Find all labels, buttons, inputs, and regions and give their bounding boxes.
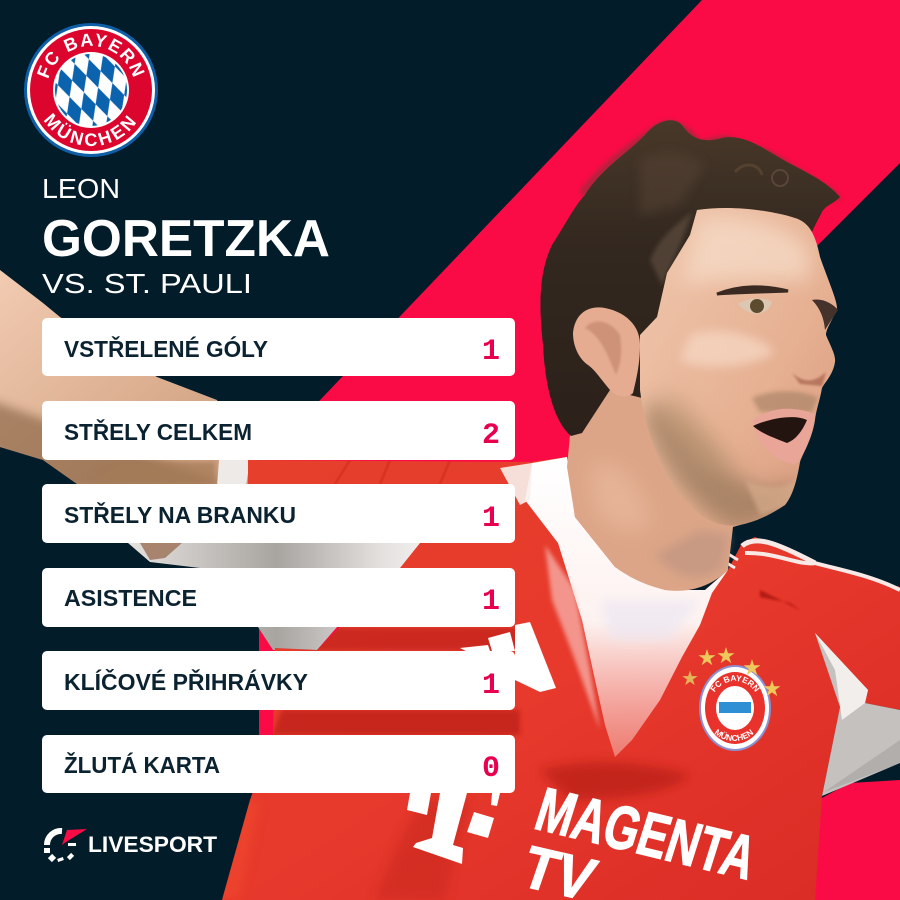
hair	[540, 120, 842, 436]
ear	[573, 307, 640, 396]
stat row: yellow card	[42, 735, 515, 793]
jersey crest and stars: ★	[697, 645, 717, 670]
jersey crest and stars: FC BAYERN	[710, 675, 760, 692]
stat row: shots on target: STŘELY NA BRANKU	[64, 501, 296, 528]
Livesport wordmark: LIVESPORT	[88, 832, 218, 857]
jersey sleeve grey	[128, 460, 425, 650]
mouth	[753, 409, 815, 464]
jersey crest and stars: ★	[762, 676, 782, 701]
stat row: total shots	[42, 401, 515, 460]
player surname: GORETZKA	[42, 210, 330, 268]
stat row: yellow card: ŽLUTÁ KARTA	[64, 751, 220, 778]
adidas stripes	[460, 622, 556, 692]
stat row: key passes: 1	[482, 669, 500, 703]
nose shadow	[792, 372, 826, 386]
stat row: goals: VSTŘELENÉ GÓLY	[64, 335, 268, 362]
jersey crest and stars: MÜNCHEN	[714, 729, 754, 741]
player first name: LEON	[42, 173, 120, 204]
stat row: goals: 1	[482, 335, 500, 369]
jersey crest and stars: ★	[716, 643, 736, 668]
stat row: shots on target: 1	[482, 502, 500, 536]
stat row: yellow card: 0	[482, 752, 500, 786]
club logo: FC Bayern: MÜNCHEN	[44, 113, 136, 146]
neck	[567, 385, 740, 591]
jersey crest and stars	[681, 643, 782, 751]
stat row: assists: ASISTENCE	[64, 585, 197, 611]
jersey body	[215, 457, 900, 900]
club logo: FC Bayern: FC BAYERN	[36, 34, 145, 78]
stat row: assists: 1	[482, 585, 500, 619]
jersey right sleeve	[815, 633, 900, 796]
eyes	[738, 298, 772, 314]
face	[640, 208, 838, 530]
player arm	[0, 270, 250, 490]
stat row: assists	[42, 568, 515, 627]
icon: Livesport logo mark	[47, 829, 87, 861]
stat row: shots on target	[42, 484, 515, 543]
stat row: key passes: KLÍČOVÉ PŘIHRÁVKY	[64, 668, 308, 695]
shoulder stripes	[722, 541, 900, 590]
stat row: total shots: 2	[482, 419, 500, 453]
eyebrows	[717, 287, 788, 294]
stat row: key passes	[42, 651, 515, 710]
jersey crest and stars: ★	[742, 655, 762, 680]
sponsor T logo	[407, 793, 500, 864]
club logo: FC Bayern	[24, 23, 158, 157]
jersey white collar panel	[500, 457, 728, 757]
stat row: goals	[42, 318, 515, 376]
opponent: VS. ST. PAULI	[42, 268, 252, 299]
jersey crest and stars: ★	[681, 668, 699, 690]
red diagonal band	[259, 0, 900, 900]
stat row: total shots: STŘELY CELKEM	[64, 418, 252, 445]
